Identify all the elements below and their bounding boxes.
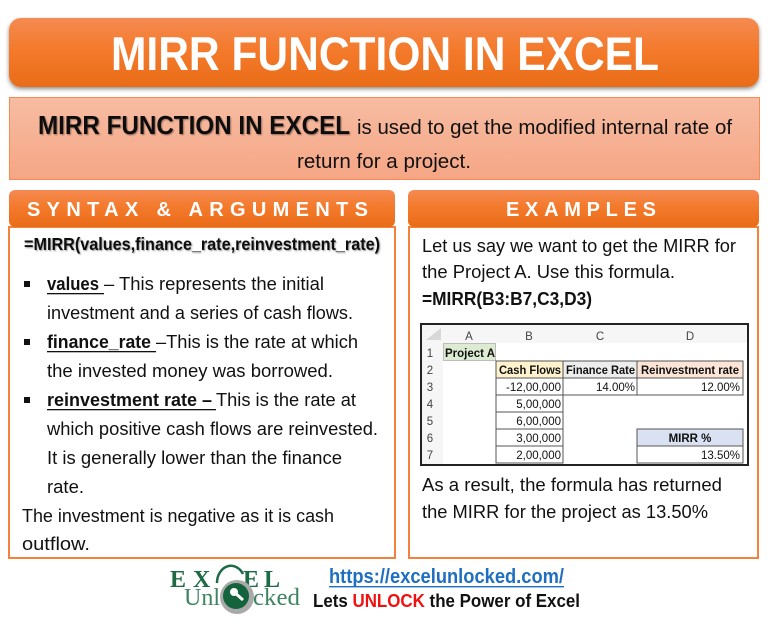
example result text: As a result, the formula has returned [422,475,722,495]
panel: examples [408,190,759,558]
example intro text [422,236,736,309]
column and row headers: 7 [427,450,433,462]
column and row headers: B [525,331,533,343]
cell text: 14.00% [596,382,635,394]
description text: is used to get the modified internal rate of [357,116,732,139]
example intro text: the Project A. Use this formula. [422,262,675,282]
cell text: 3,00,000 [516,433,561,445]
cell text: 2,00,000 [516,450,561,462]
column and row headers: 5 [427,416,433,428]
column and row headers: C [596,331,604,343]
header: syntax and arguments [9,190,395,227]
cell text: 6,00,000 [516,416,561,428]
bullet list of arguments [22,274,378,554]
header: examples: EXAMPLES [506,199,656,221]
cell text: -12,00,000 [506,382,561,394]
column and row headers: 2 [427,365,433,377]
cell text: Cash Flows [499,365,561,377]
bullet: finance_rate [24,332,358,381]
cell text: 5,00,000 [516,399,561,411]
bullet: values: – This represents the initial [104,274,324,294]
column and row headers [422,325,747,464]
logo: Excel Unlocked: cked [253,585,300,611]
bullet: values: investment and a series of cash flows. [47,303,353,323]
tagline: Lets UNLOCK the Power of Excel [313,591,580,611]
cell text: Finance Rate [566,365,635,377]
example intro text: =MIRR(B3:B7,C3,D3) [422,289,592,309]
bullet: reinvestment rate [24,390,378,497]
header: examples [408,190,759,227]
bullet: values [24,274,353,323]
cell text: 13.50% [701,450,740,462]
bullet: finance_rate: the invested money was borrowed. [47,361,333,381]
cell text: Reinvestment rate [641,365,739,377]
title banner [9,18,759,87]
logo: Excel Unlocked: L [264,567,280,593]
syntax formula: =MIRR(values,finance_rate,reinvestment_rate) [24,234,380,254]
cell text [445,348,740,462]
example intro text: Let us say we want to get the MIRR for [422,236,736,256]
description text: return for a project. [297,150,471,173]
description text [297,116,732,173]
column and row headers: 1 [427,348,433,360]
bullet: reinvestment rate: reinvestment rate – [47,390,212,410]
column and row headers: A [465,331,473,343]
cell text: 12.00% [701,382,740,394]
header: syntax and arguments: SYNTAX & ARGUMENTS [27,199,368,221]
cell text: Project A [445,348,495,360]
bullet: finance_rate: finance_rate [47,332,151,352]
cell text: MIRR % [669,433,711,445]
logo: Excel Unlocked: Unl [184,585,220,611]
column and row headers: 4 [427,399,434,411]
bullet: reinvestment rate: rate. [47,477,84,497]
logo: Excel Unlocked [170,566,300,614]
logo: Excel Unlocked: E [170,567,186,593]
bullet: reinvestment rate: which positive cash flows are reinvested. [46,419,378,439]
website link: https://excelunlocked.com/ [329,566,564,588]
spreadsheet table [421,324,748,465]
example result text: the MIRR for the project as 13.50% [422,502,708,522]
description heading: MIRR FUNCTION IN EXCEL [38,110,350,140]
note text [22,506,334,554]
cell fills and borders [444,344,743,463]
bullet: finance_rate: –This is the rate at which [156,332,358,352]
logo: Excel Unlocked: X [193,567,211,593]
bullet: reinvestment rate: This is the rate at [216,390,356,410]
column and row headers: 6 [427,433,433,445]
title: MIRR FUNCTION IN EXCEL [111,27,659,80]
logo: Excel Unlocked: E [243,567,259,593]
bullet: values: values [47,274,99,294]
panel: description [10,98,760,180]
note text: outflow. [22,534,90,554]
column and row headers: 3 [427,382,433,394]
note text: The investment is negative as it is cash [22,506,334,526]
example result text [422,475,722,522]
panel: syntax and arguments [9,190,395,558]
column and row headers: D [686,331,694,343]
bullet: reinvestment rate: It is generally lower than the finance [47,448,342,468]
